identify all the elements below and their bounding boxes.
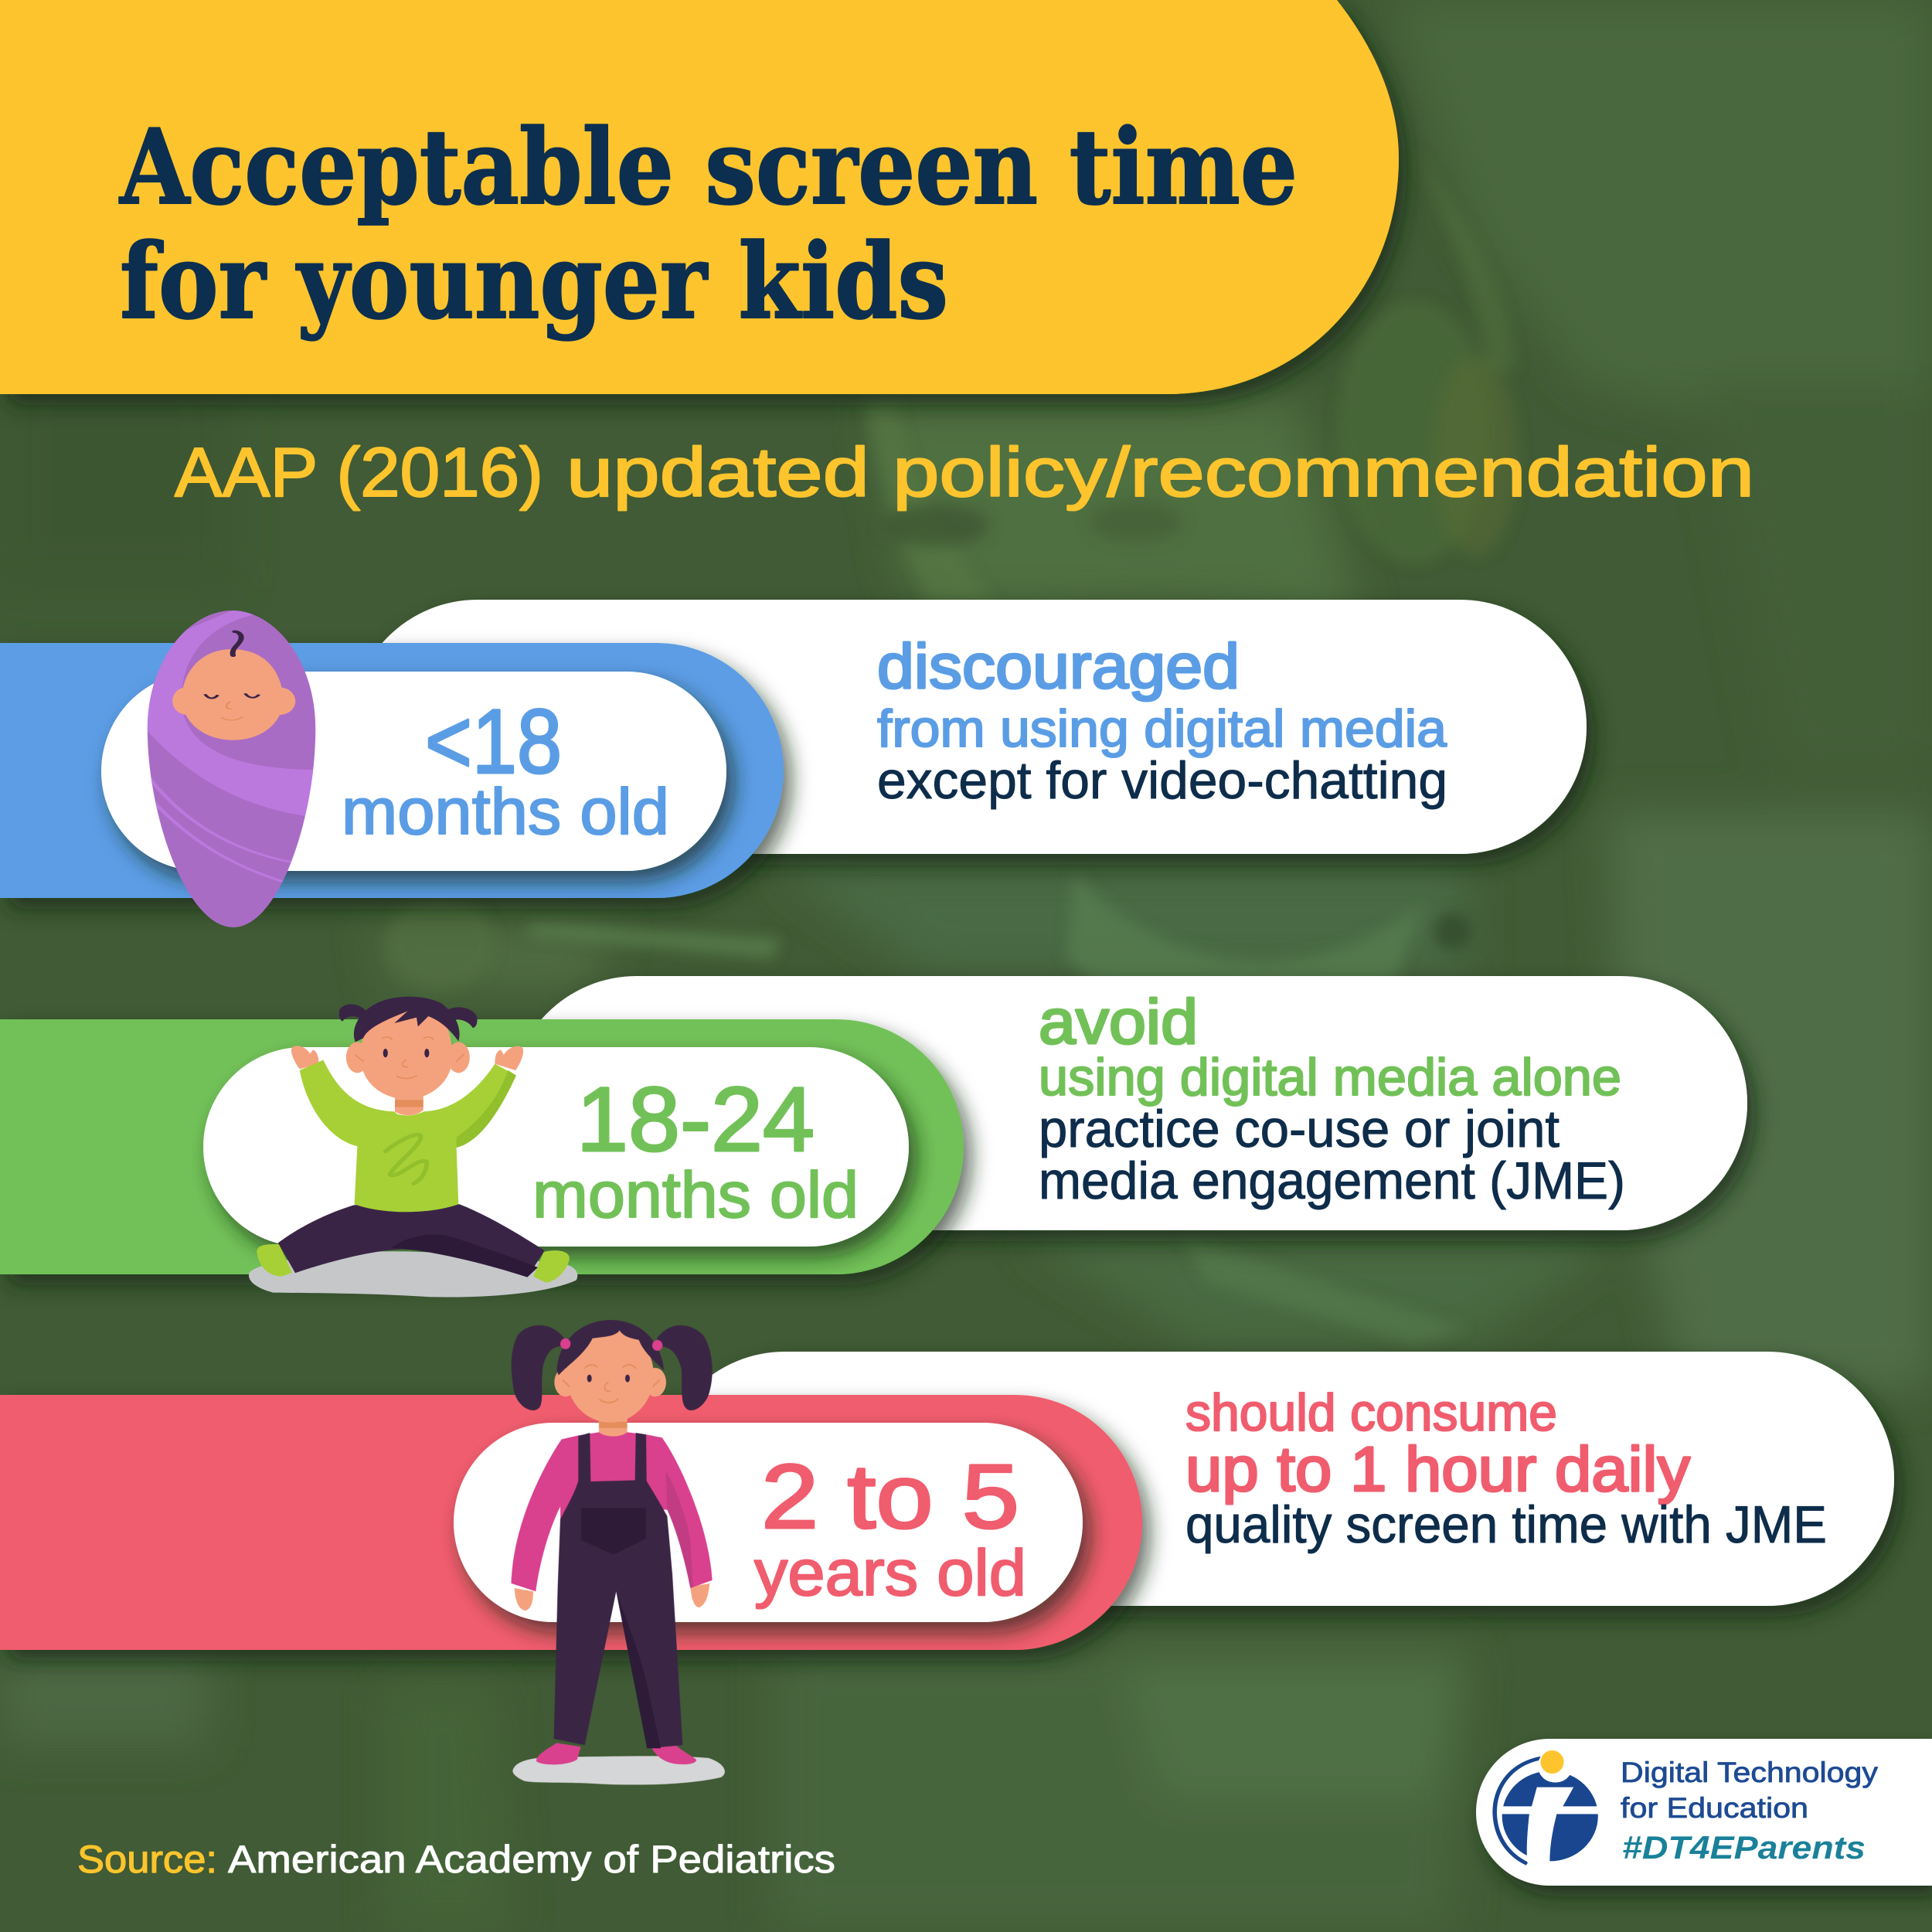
logo text: [1621, 1757, 1879, 1866]
row 2 message text: media engagement (JME): [1039, 1151, 1625, 1210]
row 1 message text: except for video-chatting: [877, 751, 1447, 810]
title text: [118, 106, 1298, 342]
row 1 age label: <18: [425, 691, 562, 793]
icon: DT4E logo: [1495, 1749, 1600, 1864]
row 2 age label: 18-24: [577, 1069, 815, 1171]
subtitle: [175, 434, 1754, 512]
row 1 message text: from using digital media: [877, 699, 1447, 758]
row 1 message text: [877, 631, 1447, 810]
row 1 white message card: [351, 600, 1587, 854]
row 1: under 18 months: [0, 600, 1587, 927]
row 3 red band: [0, 1395, 1142, 1650]
row 1 blue band: [0, 643, 784, 898]
row 1 inner white pill: [101, 672, 726, 871]
row 2: 18-24 months: [0, 976, 1747, 1298]
row 3 inner white pill: [454, 1423, 1083, 1622]
row 3 age label: years old: [754, 1536, 1026, 1609]
logo text: Digital Technology: [1621, 1757, 1879, 1788]
row 2 inner white pill: [203, 1047, 909, 1247]
subtitle: updated policy/recommendation: [566, 434, 1754, 512]
row 3 message text: [1185, 1383, 1827, 1554]
row 3 age label: 2 to 5: [761, 1446, 1019, 1548]
subtitle: AAP (2016): [175, 434, 543, 512]
row 2 age label: [532, 1069, 859, 1231]
row 1 age label: months old: [342, 775, 669, 848]
row 1 message text: discouraged: [877, 631, 1240, 702]
row 2 message text: [1039, 987, 1625, 1210]
title text: for younger kids: [120, 220, 948, 342]
row 3 message text: should consume: [1185, 1383, 1557, 1442]
row 3 message text: up to 1 hour daily: [1185, 1434, 1690, 1505]
icon: standing girl: [512, 1320, 725, 1785]
logo text: #DT4EParents: [1622, 1829, 1866, 1866]
icon: sitting toddler: [249, 997, 577, 1298]
source line: Source:: [77, 1838, 217, 1881]
row 2 white message card: [510, 976, 1747, 1230]
icon: swaddled baby: [141, 611, 320, 927]
row 3 message text: quality screen time with JME: [1185, 1495, 1827, 1554]
row 2 green band: [0, 1019, 964, 1274]
row 2 age label: months old: [532, 1158, 859, 1231]
source line: American Academy of Pediatrics: [228, 1838, 835, 1881]
logo panel: [1476, 1739, 1932, 1886]
logo text: for Education: [1621, 1792, 1808, 1824]
row 1 age label: [342, 691, 669, 848]
title banner: [0, 0, 1399, 394]
row 3 age label: [754, 1446, 1026, 1609]
row 3 white message card: [658, 1352, 1894, 1606]
row 2 message text: practice co-use or joint: [1039, 1100, 1560, 1158]
title text: Acceptable screen time: [118, 106, 1298, 228]
row 3: 2 to 5 years: [0, 1320, 1894, 1785]
row 2 message text: avoid: [1039, 987, 1198, 1057]
row 2 message text: using digital media alone: [1039, 1048, 1621, 1107]
